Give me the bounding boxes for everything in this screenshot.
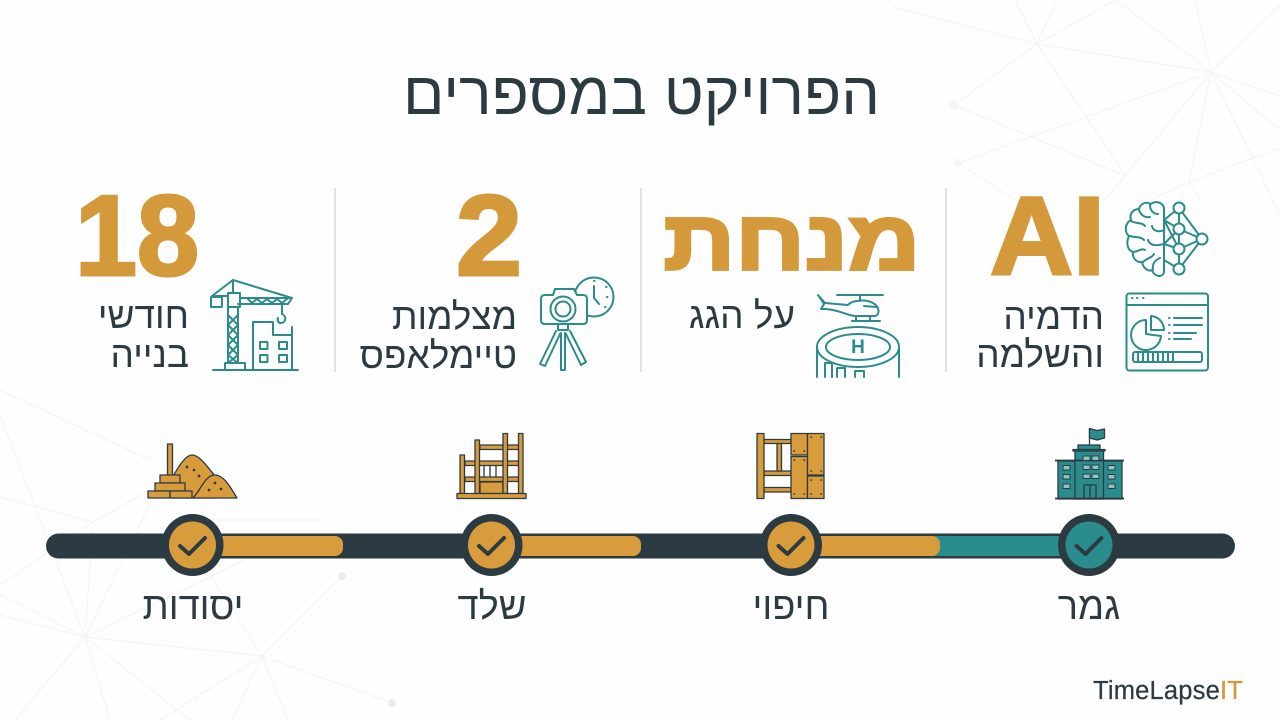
- title: הפרויקט במספרים: [403, 60, 880, 127]
- icon: foundations: [148, 444, 237, 498]
- label: foundations: יסודות: [142, 586, 244, 628]
- icon label: helipad H: H: [851, 337, 865, 358]
- icon: cladding: [757, 434, 824, 498]
- milestone check: [162, 514, 224, 576]
- icon: dashboard: [1126, 294, 1208, 370]
- stat: helipad word: מנחת: [664, 194, 920, 288]
- icon: frame: [457, 434, 526, 498]
- label: second line: טיימלאפס: [360, 335, 517, 376]
- milestone: frame: [457, 434, 526, 628]
- icon: camera on tripod with clock: [540, 278, 614, 370]
- timeline: [46, 428, 1235, 628]
- timeline track: [46, 534, 1235, 558]
- icon: finished building: [1055, 428, 1124, 499]
- progress segment 3: [805, 536, 940, 556]
- icon: brain network: [1126, 202, 1208, 276]
- panel: time-lapse cameras: [360, 173, 614, 376]
- progress segment teal: [900, 536, 1070, 556]
- progress segment 2: [505, 536, 641, 556]
- milestone: cladding: [752, 434, 830, 628]
- label: simulation and completion: הדמיה: [1003, 296, 1104, 337]
- stat: 2: 2: [456, 173, 522, 300]
- panel: construction months: [75, 173, 298, 375]
- milestone check: [1058, 514, 1120, 576]
- label: on the roof: על הגג: [689, 295, 795, 336]
- label: frame: שלד: [458, 586, 526, 628]
- icon: helicopter over helipad: [817, 295, 899, 377]
- label: construction months: חודשי: [98, 295, 189, 336]
- milestone check: [460, 514, 522, 576]
- label: completion: גמר: [1058, 586, 1120, 628]
- progress segment 1: [205, 536, 343, 556]
- panel: helipad: [664, 194, 920, 377]
- label: time-lapse cameras: מצלמות: [392, 296, 517, 337]
- milestone: completion: [1055, 428, 1124, 628]
- milestone: foundations: [142, 444, 244, 628]
- stat: AI: AI: [990, 175, 1105, 298]
- milestone check: [760, 514, 822, 576]
- logo: TimeLapseIT: TimeLapseIT: [1093, 677, 1243, 705]
- stat: 18: 18: [75, 173, 199, 300]
- icon: tower crane and building: [211, 280, 298, 370]
- label: cladding: חיפוי: [752, 586, 830, 628]
- label: second line: בנייה: [111, 334, 189, 375]
- panel: AI simulation: [976, 175, 1208, 375]
- label: second line: והשלמה: [976, 334, 1104, 375]
